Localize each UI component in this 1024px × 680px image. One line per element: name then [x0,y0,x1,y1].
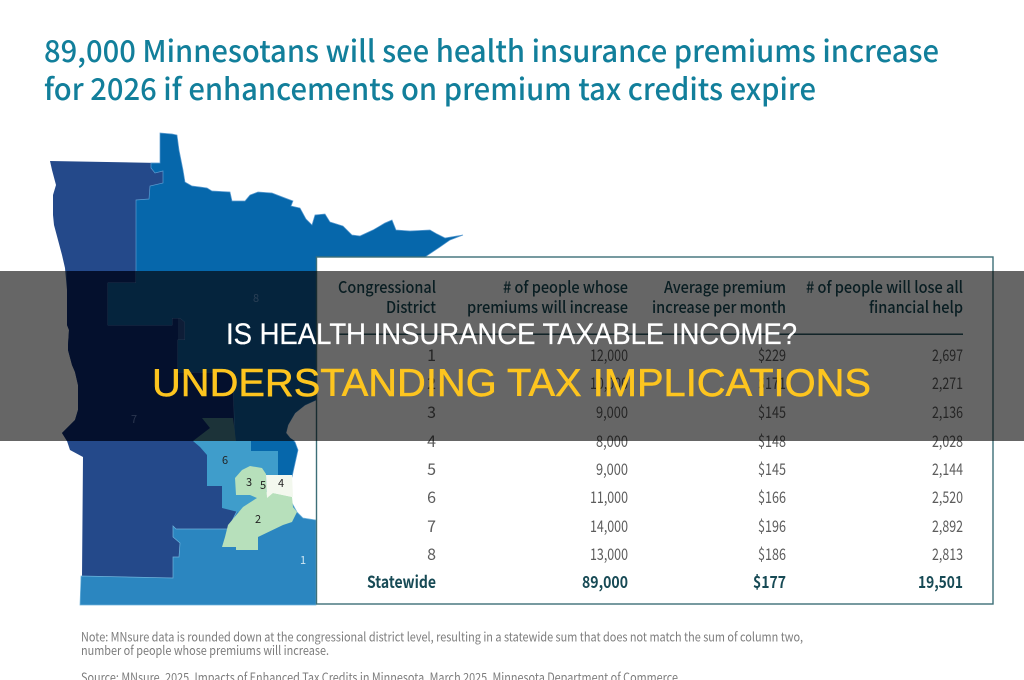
table rows: 2,136 [932,399,963,423]
table rows: 9,000 [596,456,628,480]
table rows: 12,000 [590,342,628,366]
footnote and source [81,626,803,680]
district 3 [235,466,267,498]
table rows: 3 [427,399,436,423]
district labels: 8 [253,290,259,306]
table rows: 2,697 [932,342,963,366]
table rows: 5 [427,456,436,480]
district labels: 6 [222,452,228,468]
table rows: 8 [427,541,436,565]
table rows: 2,892 [932,513,963,537]
headline overlay text: UNDERSTANDING TAX IMPLICATIONS [152,362,871,405]
district 6 [193,441,278,512]
table panel [316,257,993,604]
district labels: 7 [131,411,137,427]
district 8 band shade [108,271,330,441]
table rows: 1 [427,342,436,366]
district labels: 5 [260,477,266,493]
district 7 [50,161,245,605]
district labels: 3 [246,474,252,490]
district 1 [80,503,316,605]
table rows: 4 [427,428,436,452]
headline overlay text: IS HEALTH INSURANCE TAXABLE INCOME? [226,318,797,351]
table rows: $148 [758,428,786,452]
table header: # of people will lose all [806,274,963,298]
table rows [427,342,963,565]
table rows: $145 [758,399,786,423]
source chart title [44,27,939,109]
table header [337,274,963,335]
table rows: 6 [427,484,436,508]
district 8 [108,133,463,477]
table header: Congressional [338,274,436,298]
table rows: $229 [758,342,786,366]
table rows: $145 [758,456,786,480]
table rows: 8,000 [596,428,628,452]
table rows: 2,520 [932,484,963,508]
district labels [131,290,306,568]
table rows: 7 [427,513,436,537]
statewide total row: 89,000 [582,569,628,593]
district labels: 4 [278,475,284,491]
headline overlay text [152,318,871,405]
dark overlay band [0,271,1024,441]
source chart title: for 2026 if enhancements on premium tax credits expire [44,65,816,109]
table rows: 2,271 [932,370,963,394]
statewide total row: 19,501 [918,569,963,593]
table rows: 2,028 [932,428,963,452]
district 6 band shade [193,418,236,441]
statewide total row: Statewide [367,569,436,593]
table rows: $196 [758,513,786,537]
district labels: 2 [255,511,261,527]
source chart title: 89,000 Minnesotans will see health insurance premiums increase [44,27,939,71]
table rows: $171 [758,370,786,394]
table rows: 9,000 [596,399,628,423]
district 2 [222,493,297,550]
table rows: $166 [758,484,786,508]
table rows: 10,000 [590,370,628,394]
table rows: 2,144 [932,456,963,480]
table rows: 11,000 [590,484,628,508]
footnote and source: number of people whose premiums will increase. [81,640,329,659]
table header: District [386,294,437,318]
district 4 [266,475,293,498]
table rows: 2 [427,370,436,394]
table rows: 14,000 [590,513,628,537]
table header: # of people whose [503,274,628,298]
statewide total row [367,569,963,593]
district 7 band shade [62,271,235,441]
table rows: 13,000 [590,541,628,565]
table header: increase per month [652,294,786,318]
district labels: 1 [300,552,306,568]
statewide total row: $177 [753,569,786,593]
table header: premiums will increase [467,294,628,318]
footnote and source: Note: MNsure data is rounded down at the congressional district level, resulting in a statewide sum that does not match the sum of column two, [81,626,803,646]
table header: financial help [869,294,963,318]
table rows: 2,813 [932,541,963,565]
table rows: $186 [758,541,786,565]
table header: Average premium [664,274,786,298]
map: Minnesota congressional districts [50,133,463,605]
